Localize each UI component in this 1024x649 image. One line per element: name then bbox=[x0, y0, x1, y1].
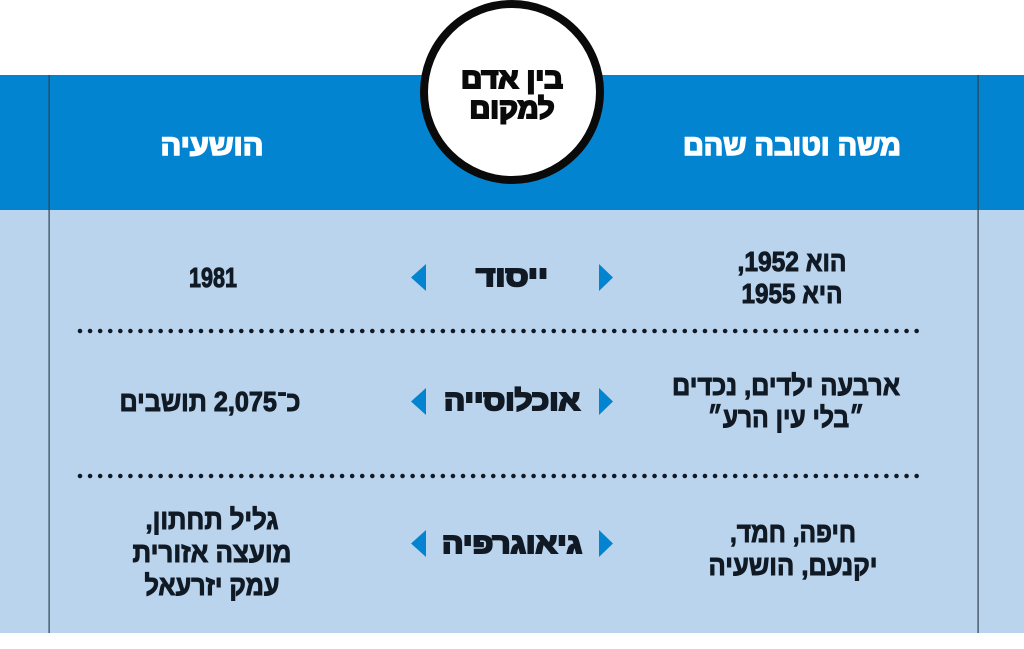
value: places lived bbox=[708, 517, 878, 581]
dotted divider bbox=[80, 329, 921, 333]
row 2: population bbox=[120, 370, 900, 433]
icon: right arrow bbox=[599, 530, 613, 557]
left vertical rule bbox=[48, 75, 50, 633]
dotted divider bbox=[80, 474, 921, 478]
header band bbox=[0, 75, 1024, 210]
value: children and grandchildren: ״בלי עין הרע״ bbox=[708, 402, 864, 433]
title badge bbox=[424, 4, 600, 180]
icon: left arrow bbox=[411, 530, 426, 557]
icon: right arrow bbox=[599, 264, 613, 291]
icon: left arrow bbox=[411, 264, 426, 291]
value: Hoshaya location: גליל תחתון, bbox=[146, 504, 278, 535]
row label: founding: ייסוד bbox=[476, 261, 548, 292]
row 1: founding bbox=[189, 246, 846, 309]
value: Moshe and Tova birth years bbox=[738, 246, 846, 309]
icon: right arrow bbox=[599, 388, 613, 415]
value: Hoshaya location bbox=[132, 504, 292, 601]
value: places lived: חיפה, חמד, bbox=[730, 517, 856, 548]
title line 2: למקום bbox=[470, 93, 554, 124]
value: Hoshaya location: עמק יזרעאל bbox=[144, 570, 280, 601]
value: children and grandchildren: ארבעה ילדים, נכדים bbox=[672, 370, 900, 401]
value: Moshe and Tova birth years: הוא 1952, bbox=[738, 246, 846, 277]
value: Moshe and Tova birth years: היא 1955 bbox=[742, 278, 842, 309]
row label: geography: גיאוגרפיה bbox=[442, 528, 582, 559]
value: Hoshaya location: מועצה אזורית bbox=[132, 537, 292, 568]
value: Hoshaya population: כ־2,075 תושבים bbox=[120, 386, 300, 417]
icon: left arrow bbox=[411, 388, 426, 415]
column heading: Hoshaya: הושעיה bbox=[160, 130, 264, 162]
title line 1: בין אדם bbox=[461, 63, 563, 94]
column heading: Moshe and Tova Shoham: משה וטובה שהם bbox=[683, 130, 901, 162]
value: places lived: יקנעם, הושעיה bbox=[708, 550, 878, 581]
row label: population: אוכלוסייה bbox=[444, 385, 580, 416]
table body panel bbox=[0, 210, 1024, 633]
right vertical rule bbox=[978, 75, 979, 633]
row 3: geography bbox=[132, 504, 878, 601]
value: children and grandchildren bbox=[672, 370, 900, 433]
value: Hoshaya founding year: 1981 bbox=[189, 262, 237, 293]
